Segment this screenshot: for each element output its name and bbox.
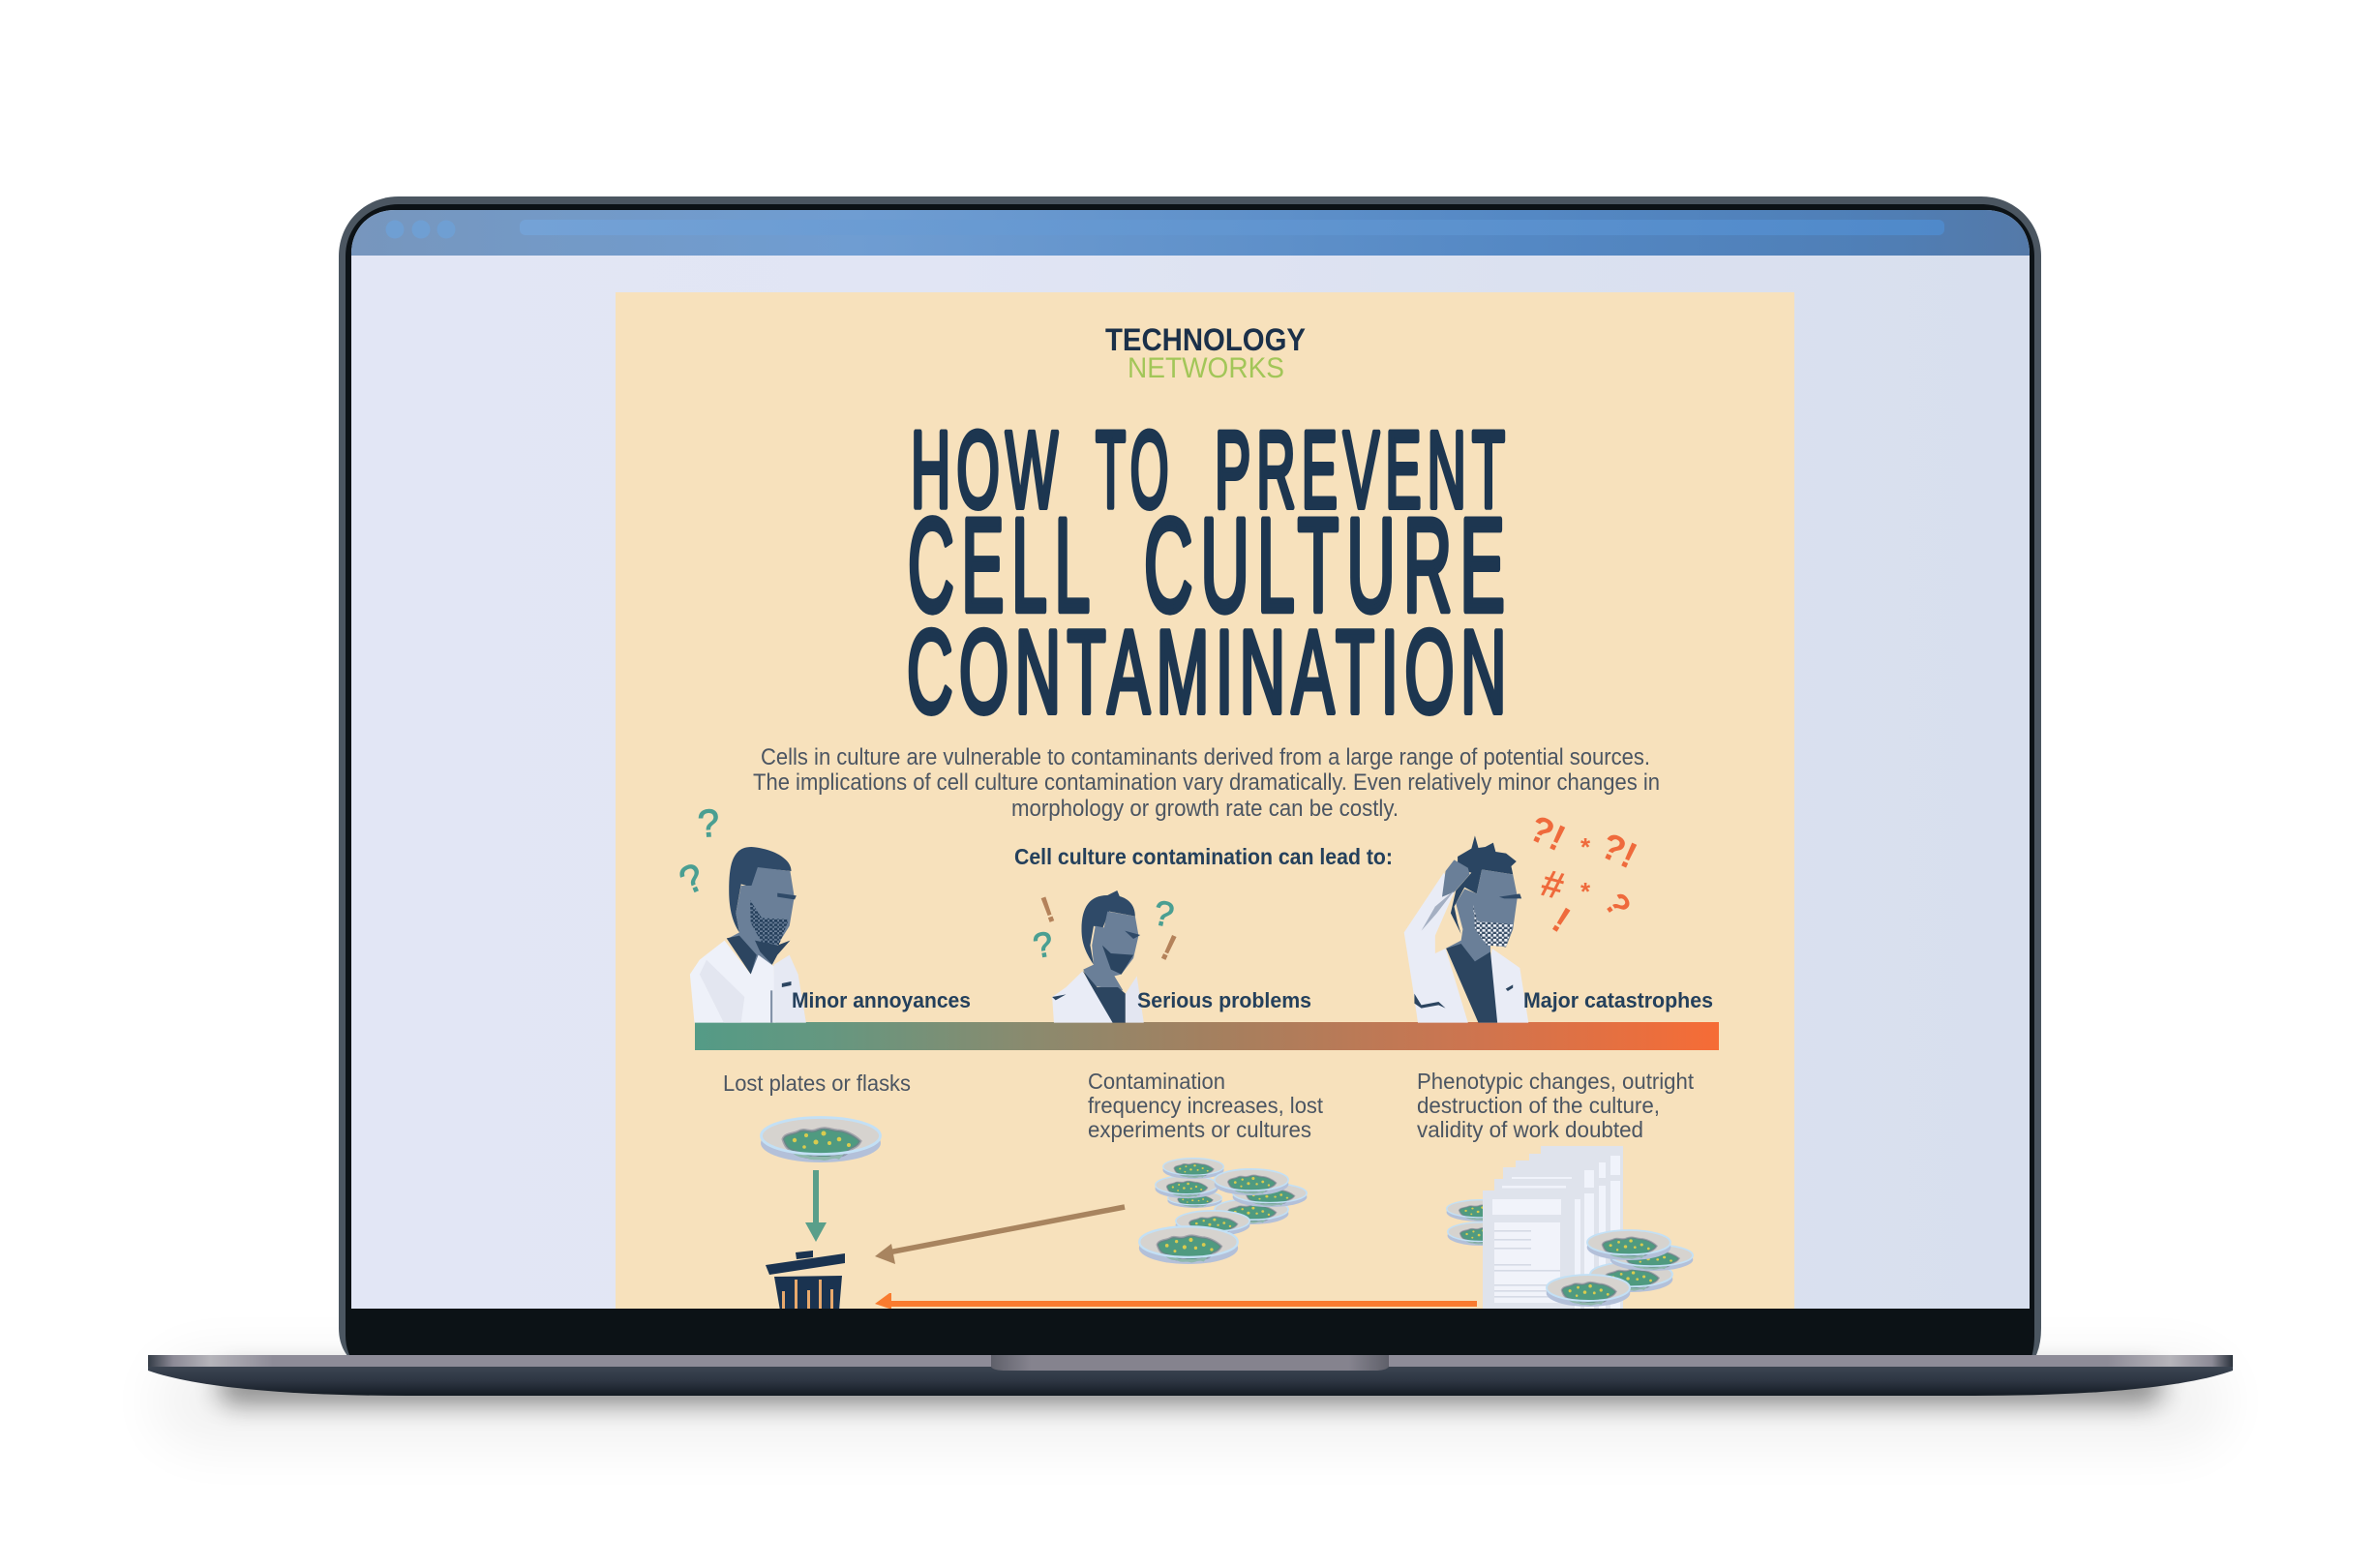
column text: major: validity of work doubted: [1417, 1117, 1643, 1142]
petri dishes: group of many: [1139, 1159, 1307, 1264]
swear symbols: ?!: [1594, 826, 1642, 877]
marks: serious problems: ?: [1030, 923, 1056, 966]
person: serious problems: [1052, 890, 1144, 1023]
title: CONTAMINATION: [907, 606, 1513, 738]
severity labels: Minor annoyances: [792, 988, 971, 1012]
screen background: [351, 210, 2031, 1309]
marks: serious problems: [1034, 896, 1177, 960]
stack of papers: [1483, 1146, 1623, 1311]
hinge notch: [991, 1355, 1389, 1371]
laptop base: [148, 1355, 2233, 1396]
column text: major: [1417, 1069, 1695, 1142]
intro text: The implications of cell culture contamination vary dramatically. Even relatively minor changes in: [753, 769, 1660, 796]
swear symbols: #: [1537, 861, 1569, 908]
person: minor annoyances: [690, 847, 806, 1023]
petri dish: single: [761, 1117, 881, 1162]
logo: NETWORKS: [1128, 352, 1284, 384]
subheading: Cell culture contamination can lead to:: [1014, 844, 1393, 869]
swear symbols: ?: [1596, 887, 1638, 924]
title: [908, 428, 1506, 716]
swear symbols: *: [1580, 832, 1591, 861]
title: TO: [1096, 409, 1174, 530]
severity labels: Serious problems: [1137, 988, 1311, 1012]
title: CULTURE: [1144, 492, 1513, 640]
arrow: brown diagonal: [875, 1207, 1125, 1264]
marks: serious problems: !: [1157, 927, 1182, 967]
swear symbols: ?!: [1522, 808, 1571, 859]
question marks: minor annoyances: ?: [674, 856, 710, 903]
severity labels: Major catastrophes: [1523, 988, 1713, 1012]
trash can: [766, 1251, 845, 1311]
column text: major: Phenotypic changes, outright: [1417, 1069, 1695, 1094]
column text: serious: frequency increases, lost: [1088, 1093, 1324, 1118]
swear symbols: !: [1545, 900, 1577, 941]
title: HOW: [911, 409, 1064, 530]
swear symbols: *: [1580, 877, 1591, 906]
arrow: orange horizontal: [875, 1293, 1477, 1309]
swear symbols: [1533, 817, 1638, 932]
column text: major: destruction of the culture,: [1417, 1093, 1660, 1118]
question marks: minor annoyances: ?: [697, 802, 721, 846]
question marks: minor annoyances: [679, 809, 718, 892]
infographic page: [616, 292, 1794, 1311]
marks: serious problems: !: [1037, 890, 1059, 930]
column text: serious: Contamination: [1088, 1069, 1225, 1094]
intro text: Cells in culture are vulnerable to contaminants derived from a large range of potential sources.: [761, 744, 1650, 770]
intro text: [753, 744, 1660, 822]
title: PREVENT: [1215, 409, 1511, 530]
arrow: teal down: [805, 1170, 827, 1242]
petri dishes in front of papers: [1547, 1230, 1693, 1307]
column text: serious: [1088, 1069, 1324, 1142]
severity gradient bar: [695, 1022, 1719, 1050]
person: major catastrophes: [1404, 835, 1528, 1023]
logo: TECHNOLOGY: [1105, 322, 1306, 357]
laptop lid frame: [339, 196, 2041, 1357]
intro text: morphology or growth rate can be costly.: [1011, 796, 1399, 822]
drop shadow under laptop: [155, 1355, 2226, 1447]
marks: serious problems: ?: [1150, 892, 1177, 935]
laptop mockup scene: [148, 196, 2233, 1437]
severity labels: [793, 992, 1713, 1012]
column text: serious: experiments or cultures: [1088, 1117, 1311, 1142]
title: CELL: [908, 492, 1098, 640]
column text: minor: Lost plates or flasks: [723, 1070, 911, 1096]
browser bar: [351, 210, 2031, 256]
petri dishes behind papers: [1446, 1199, 1483, 1246]
screen: [351, 210, 2031, 1311]
logo: [1105, 328, 1305, 377]
